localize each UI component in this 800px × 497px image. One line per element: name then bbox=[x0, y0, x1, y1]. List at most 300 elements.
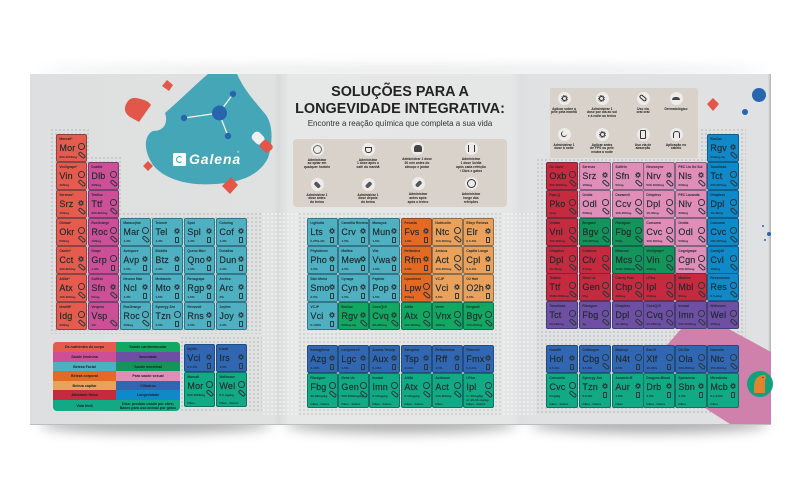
card: Mto: Melatonin bbox=[155, 277, 171, 281]
card: Cvl bbox=[707, 246, 739, 274]
card: Rfm bbox=[401, 246, 432, 274]
card: Vwa: Vwa bbox=[372, 254, 390, 264]
card: Imn: Imn bbox=[372, 382, 388, 392]
card: Mbl: 80mg bbox=[678, 294, 686, 298]
card: Act: 150-300mg bbox=[435, 267, 451, 271]
card: Lpw: 350mg bbox=[404, 295, 414, 299]
card: Rfm: Rfm bbox=[404, 254, 422, 264]
card: Drb: Cães · Gatos bbox=[646, 402, 665, 406]
application text 2 bbox=[587, 106, 617, 118]
card: Lpw: Lipowheat bbox=[404, 277, 421, 281]
card: Ipl: Cães · Gatos bbox=[466, 402, 485, 406]
card: Tct: Tct bbox=[710, 170, 722, 180]
card: Roc: RocOrange bbox=[123, 305, 141, 309]
legend note: Dica: produto usado por cães; bbox=[122, 402, 174, 406]
legend item: Beleza capilar bbox=[72, 384, 96, 388]
card: Rgp: Renagrape bbox=[187, 277, 204, 281]
card: Wel: Wel bbox=[710, 310, 726, 320]
card: Tsp: Tsp bbox=[404, 354, 419, 364]
card: Hol: Hololift bbox=[549, 348, 561, 352]
card: Vci: 5-100% bbox=[310, 323, 321, 327]
instruction text 8: Administrar bbox=[462, 192, 480, 196]
instruction text 3 bbox=[402, 157, 432, 169]
icon: meal bbox=[411, 142, 424, 155]
legend item: Imunidade bbox=[139, 355, 157, 359]
card: Oxb bbox=[546, 162, 578, 190]
card: Pko bbox=[546, 190, 578, 218]
card: Imn: Cães · Gatos bbox=[372, 402, 391, 406]
card: Gen: Gen bbox=[582, 282, 600, 292]
application text 8: cabelo bbox=[671, 146, 681, 150]
card: Joy: Joy bbox=[219, 310, 234, 320]
application text 5 bbox=[553, 142, 575, 150]
card: Rff: Reflorestina bbox=[435, 348, 454, 352]
icon: capsule bbox=[636, 92, 650, 104]
card: Rgv: 500mg-2g bbox=[341, 323, 356, 327]
card: Sfn bbox=[88, 274, 119, 302]
application text 3: Uso via bbox=[637, 106, 649, 110]
card: Mor: Cães bbox=[187, 400, 195, 404]
card: Tct: 50-200mg bbox=[549, 322, 564, 326]
card: Aux: 5-10% bbox=[372, 366, 381, 370]
card: Vci: VC-IP bbox=[435, 277, 444, 281]
card: O2h: O2 Hair bbox=[466, 277, 478, 281]
card: Tel: Telomir bbox=[155, 221, 167, 225]
card: Srz: Srz bbox=[59, 198, 74, 208]
card: Pho: 1-5% bbox=[310, 267, 318, 271]
card: Cct: Cct bbox=[59, 254, 74, 264]
card: Pop: Pop bbox=[372, 282, 389, 292]
legend item: Os nutrientes do corpo bbox=[65, 345, 104, 349]
legend item bbox=[116, 381, 180, 391]
card: Ttf bbox=[88, 190, 119, 218]
card: Res: Resveravine bbox=[710, 276, 730, 280]
instruction text 5: dose antes bbox=[308, 196, 326, 200]
card: Elr: Elr bbox=[466, 226, 478, 236]
card: Mcs: Mcs bbox=[615, 254, 632, 264]
card: Sfn: 50mg bbox=[615, 183, 623, 187]
card: Atx: 100-400mg bbox=[59, 295, 75, 299]
card: Vci: Vci bbox=[187, 352, 200, 362]
card: O2h: 3-5% bbox=[466, 295, 474, 299]
card: Wel: Cães · Gatos bbox=[219, 400, 238, 404]
instruction text 4 bbox=[456, 157, 486, 173]
card: Vsp: 1% bbox=[91, 323, 96, 327]
card: Rns: Rns bbox=[187, 310, 204, 320]
legend item: Saúde cardiovascular bbox=[129, 345, 167, 349]
card: Wel: Wel bbox=[219, 380, 235, 390]
card: Imn bbox=[675, 301, 707, 328]
card: Mun: Munayca bbox=[372, 221, 386, 225]
card: Mbl: Mbl bbox=[678, 282, 694, 292]
card: Cof: Cof bbox=[219, 226, 234, 236]
card: Vci bbox=[432, 274, 463, 302]
card: Drb bbox=[643, 373, 675, 408]
card: Tel: Tel bbox=[155, 226, 168, 236]
card: Lts: 0,25%-3% bbox=[310, 239, 325, 243]
card: Nls: 300mg bbox=[678, 183, 688, 187]
card: Nls bbox=[675, 162, 707, 190]
card: Vin bbox=[56, 162, 87, 190]
card: Vin: VinOgrape* bbox=[646, 249, 664, 253]
instruction text 4: / Cães e gatos bbox=[460, 169, 482, 173]
card: Dlb: 300mg bbox=[91, 183, 101, 187]
card: Fbg bbox=[612, 218, 644, 246]
card: Joy bbox=[216, 302, 247, 330]
card: Roc: 100mg bbox=[123, 323, 133, 327]
card: Chp bbox=[612, 273, 644, 300]
card: Ntc bbox=[707, 345, 739, 372]
card: Irs bbox=[216, 344, 247, 372]
card: Cct bbox=[56, 246, 87, 274]
card: Gen: Gene Uc bbox=[341, 376, 355, 380]
card: Sfn: Sfn bbox=[91, 282, 106, 292]
card: Sbn: Sbn bbox=[678, 382, 695, 392]
card: Ncl bbox=[120, 274, 151, 302]
card: Mor: 500-1000mg bbox=[187, 393, 205, 397]
card: Ccv: 100-200mg bbox=[615, 211, 631, 215]
card: Bgv: Bergavit bbox=[466, 305, 480, 309]
card: Mcb: Mcb bbox=[710, 382, 728, 392]
card: Srz: Serenzo* bbox=[59, 193, 74, 197]
card: Atx: 100-300mg bbox=[404, 323, 420, 327]
card: Cbg: 0,5-3% bbox=[582, 366, 592, 370]
card: Oxb: 500-1000mg bbox=[549, 183, 567, 187]
card: Idg bbox=[56, 302, 87, 330]
card: Mar bbox=[120, 218, 151, 246]
application text 7: Uso via de bbox=[635, 142, 651, 146]
card: Tct: Tonalimax bbox=[549, 304, 565, 308]
card: Tzn: 0,5-3% bbox=[582, 394, 592, 398]
card: Rff bbox=[432, 345, 463, 372]
card: Idg: Idg bbox=[59, 310, 73, 320]
card: Btz: Btz bbox=[155, 254, 169, 264]
card: Sbn: Spinsensa bbox=[678, 376, 695, 380]
card: Vnl: Vinitae bbox=[549, 221, 560, 225]
card: Mcb: Cães bbox=[710, 402, 718, 406]
card: Arc: Arc bbox=[219, 282, 234, 292]
card: Fbg: 500g bbox=[615, 239, 622, 243]
card: Ipl: Ipl bbox=[646, 282, 656, 292]
card: Hol: Hol bbox=[549, 354, 564, 364]
instruction text 2 bbox=[356, 158, 380, 169]
card: Nlv: PEC Lavanda bbox=[678, 193, 699, 197]
card: Rgv: BioCav bbox=[341, 305, 353, 309]
card: Mcs: Mitocare bbox=[615, 249, 629, 253]
card: Sfn: Sulfirin bbox=[91, 277, 103, 281]
card: Clv bbox=[579, 246, 611, 274]
card: Mun: 1-5% bbox=[372, 239, 380, 243]
card: Cvq: CoxsQ10 bbox=[646, 304, 661, 308]
legend item: Cílindros bbox=[140, 384, 156, 388]
card: Rns bbox=[184, 302, 215, 330]
card: Cvq: 30-200mg bbox=[372, 323, 387, 327]
card: Cof: Coloring bbox=[219, 221, 233, 225]
card: Ipl: Ipl bbox=[466, 382, 476, 392]
card: Gen: Gene Uc bbox=[582, 276, 596, 280]
card: Cbg bbox=[579, 345, 611, 372]
card: Drb: Drb bbox=[646, 382, 662, 392]
card: Vnl: 150-300mg bbox=[549, 239, 565, 243]
card: Xlf bbox=[643, 345, 675, 372]
card: Roc: 100mg bbox=[91, 239, 101, 243]
card: Gen: Cães · Gatos bbox=[341, 402, 360, 406]
card: Mun bbox=[369, 218, 400, 246]
card: Fbg bbox=[307, 373, 338, 408]
icon: pill after workout bbox=[362, 178, 375, 191]
card: Crv: Camellia Reviera bbox=[341, 221, 368, 225]
card: Ncl: 1-3% bbox=[123, 295, 131, 299]
card: Cvl: 100mg bbox=[710, 267, 720, 271]
card: Vnx: 150mg bbox=[435, 323, 445, 327]
card: Mto: 1-5% bbox=[155, 295, 163, 299]
card: Tct: 250-500mg bbox=[710, 183, 726, 187]
icon: sun midday bbox=[596, 128, 608, 140]
card: Vin bbox=[643, 246, 675, 274]
card: Rgv: Rgv bbox=[341, 310, 358, 320]
card: Vci: Vci bbox=[435, 282, 448, 292]
legend item: Para saúde sexual bbox=[132, 374, 164, 378]
card: Tel bbox=[152, 218, 183, 246]
card: Cvc: Curcuma bbox=[646, 221, 661, 225]
card: Vnl: Vnl bbox=[549, 226, 563, 236]
card: Tzn: Tzn bbox=[582, 382, 598, 392]
application text 6: Aplicar antes bbox=[592, 142, 612, 146]
card: Odl: 500mg bbox=[678, 239, 688, 243]
card: Mcs: 1000-1500mg bbox=[615, 267, 635, 271]
card: Vsp: Vespero bbox=[91, 305, 104, 309]
card: Dlb: Dualite bbox=[91, 165, 102, 169]
legend item bbox=[116, 371, 180, 381]
card: Dpl: 10-40mg bbox=[646, 211, 659, 215]
card: Tsp bbox=[401, 345, 432, 372]
application text 3: oral oral bbox=[636, 110, 650, 114]
card: Lgc bbox=[338, 345, 369, 372]
card: Act: Act bbox=[435, 382, 449, 392]
card: Cvc: 100-400mg bbox=[710, 239, 726, 243]
card: Dpl: Dpl bbox=[646, 198, 660, 208]
legend item bbox=[53, 352, 116, 362]
card: Oxb: Oxb bbox=[549, 170, 566, 180]
card: Act: Actimove bbox=[435, 376, 450, 380]
card: Fbg: Fbg bbox=[310, 382, 326, 392]
card: Mor: 800-1000mg bbox=[59, 155, 77, 159]
card: O2h: O2h bbox=[466, 282, 484, 292]
card: Cvq: 30-200mg bbox=[646, 322, 661, 326]
card: Lpw bbox=[401, 274, 432, 302]
card: Srz: 150mg bbox=[59, 211, 69, 215]
card: Mcb bbox=[707, 373, 739, 408]
instruction text 8 bbox=[462, 192, 480, 204]
card: Cvq: CoxsQ10 bbox=[372, 305, 387, 309]
card: Idg: Idealift* bbox=[59, 305, 71, 309]
card: N4t: 3-5% bbox=[615, 366, 623, 370]
card: Fbg: 30-60mg/kg bbox=[310, 394, 327, 398]
card: Atx bbox=[401, 373, 432, 408]
card: Fbg: Fibragum bbox=[615, 221, 630, 225]
instruction text 3: almoço e jantar bbox=[405, 165, 429, 169]
application text 1: pele pela manhã bbox=[551, 110, 577, 114]
card: Ntc: Nutricolin bbox=[435, 221, 451, 225]
card: Bgv: Bergavit bbox=[582, 221, 596, 225]
card: Nlv: 300mg bbox=[678, 211, 688, 215]
card: Aux: Aux bbox=[372, 354, 388, 364]
card: Act: Act bbox=[435, 254, 449, 264]
card: Cyn: 1-5% bbox=[341, 295, 349, 299]
card: Aur: Aur bbox=[615, 382, 630, 392]
card: Xlf: 10-30% bbox=[646, 366, 657, 370]
card: Ccv: Ccv bbox=[615, 198, 632, 208]
instruction text 7 bbox=[408, 192, 428, 204]
instruction text 6: do treino bbox=[361, 200, 375, 204]
instruction text 4: Administrar bbox=[462, 157, 480, 161]
card: Lgc: Longevicell bbox=[341, 348, 360, 352]
card: Dpl: Dimpless bbox=[710, 193, 725, 197]
icon: mascot bbox=[747, 371, 773, 397]
card: Ttf: Teaflux bbox=[91, 193, 103, 197]
card: Ncl: Neuron Max bbox=[123, 277, 142, 281]
card: Btz: Bioblitz bbox=[155, 249, 167, 253]
application text 2: Administrar 1 bbox=[591, 106, 613, 110]
card: Mbl bbox=[675, 273, 707, 300]
card: Elr bbox=[463, 218, 494, 246]
icon: pill around workout bbox=[412, 177, 425, 190]
card: Imn bbox=[369, 373, 400, 408]
card: Rns: Renovoil bbox=[187, 305, 201, 309]
card: O2h bbox=[463, 274, 494, 302]
icon: pill before workout bbox=[311, 178, 324, 191]
card: Xlf: Xlf bbox=[646, 354, 658, 364]
card: Ttf: Ttf bbox=[549, 282, 560, 292]
card: Wel: 0-5 mg/kg bbox=[219, 393, 234, 397]
card: Sfn: Sulfirin bbox=[615, 165, 627, 169]
card: Bgv: 150-500mg bbox=[582, 239, 598, 243]
card: Fbg: Fbg bbox=[582, 310, 598, 320]
card: Rns: 1-5% bbox=[187, 323, 195, 327]
card: Smo: Smo bbox=[310, 282, 330, 292]
card: Ntc: Ntc bbox=[710, 354, 724, 364]
text: ® bbox=[237, 150, 239, 154]
card: Chp: Cherry Pure bbox=[615, 276, 634, 280]
card: Fmx bbox=[463, 345, 494, 372]
card: Mor: Mor bbox=[59, 142, 76, 152]
icon: sun and moon bbox=[596, 92, 608, 104]
card: Mew bbox=[338, 246, 369, 274]
application text 2: dose por dia ao sol bbox=[587, 110, 617, 114]
card: Cvc: Cvc bbox=[710, 226, 726, 236]
card: Dun bbox=[216, 246, 247, 274]
legend item bbox=[116, 352, 180, 362]
instruction text 1: Administrar bbox=[308, 158, 326, 162]
card: Rgp bbox=[184, 274, 215, 302]
instruction text 6: dose depois bbox=[358, 196, 378, 200]
card: Mew: 1-5% bbox=[341, 267, 349, 271]
card: Dpl: 10-40mg bbox=[615, 322, 628, 326]
card: Bgv: 150-500mg bbox=[466, 323, 482, 327]
card: Odl bbox=[675, 218, 707, 246]
card: Tzn: Tzn bbox=[155, 310, 171, 320]
card: Dun: 1-3% bbox=[219, 267, 227, 271]
card: Chp: 480mg bbox=[615, 294, 625, 298]
instruction text 6 bbox=[357, 192, 379, 204]
application text 4: Dermatológico bbox=[664, 106, 688, 110]
card: Cvc: Cvc bbox=[549, 382, 566, 392]
card: Cpl bbox=[463, 246, 494, 274]
card: Cvl: CuraQ10 bbox=[710, 249, 724, 253]
card: Fbg: Fibragum bbox=[582, 304, 597, 308]
legend item bbox=[53, 381, 116, 391]
card: Bgv bbox=[463, 302, 494, 330]
card: Roc bbox=[120, 302, 151, 330]
card: Nrv: Neurosyne bbox=[646, 165, 663, 169]
legend item: Vida fértil bbox=[76, 404, 93, 408]
card: Cbg: Cbg bbox=[582, 354, 600, 364]
title bbox=[295, 82, 505, 116]
card: Arc bbox=[216, 274, 247, 302]
card: Lpw: Lpw bbox=[404, 282, 422, 292]
card: Aux: Auxina Tricolp bbox=[372, 348, 395, 352]
card: Odl: Odl bbox=[582, 198, 597, 208]
card: Tsp: 3-10% bbox=[404, 366, 413, 370]
card: Smo: Skin Moist bbox=[310, 277, 327, 281]
card: Vin: 400mg bbox=[59, 183, 69, 187]
card: Bgv bbox=[579, 218, 611, 246]
title: SOLUÇÕES PARA A bbox=[331, 84, 469, 100]
card: Imn: Imn bbox=[678, 310, 694, 320]
card: Cpl: Cpl bbox=[466, 254, 480, 264]
card: Res bbox=[707, 273, 739, 300]
card: Cvc: Cvc bbox=[646, 226, 662, 236]
card: Vci: 0,5-3% bbox=[187, 365, 197, 369]
card: Ntc: 150-300mg bbox=[710, 366, 726, 370]
legend note bbox=[120, 402, 176, 410]
card: Dpl: Dpl bbox=[615, 310, 630, 320]
card: Aur: 1-5% bbox=[615, 394, 623, 398]
card: Fbg: Fbg bbox=[615, 226, 632, 236]
card: Odl: Oxidix bbox=[678, 221, 688, 225]
card: Mor: Morosil* bbox=[59, 137, 72, 141]
card: Roc: RocOrange bbox=[91, 221, 109, 225]
application text 1: Aplicar sobre a bbox=[552, 106, 576, 110]
card: Mar: Mar bbox=[123, 226, 140, 236]
card: Ntc bbox=[432, 218, 463, 246]
card: Odl bbox=[579, 190, 611, 218]
icon: clock bbox=[311, 143, 324, 156]
card: Dpl: 10-40mg bbox=[549, 267, 562, 271]
card: Rgv: BioCav bbox=[710, 137, 722, 141]
card: Tsp: Sensphor bbox=[404, 348, 420, 352]
card: Rfm: 3-5% bbox=[404, 267, 412, 271]
card: Mto bbox=[152, 274, 183, 302]
card: Vsp bbox=[88, 302, 119, 330]
card: Grp bbox=[88, 246, 119, 274]
card: N4t bbox=[612, 345, 644, 372]
card: Spl: Spl bbox=[187, 226, 201, 236]
card: Cof: 1-3% bbox=[219, 239, 227, 243]
title: LONGEVIDADE INTEGRATIVA: bbox=[295, 100, 505, 116]
card: Elr: Elixyr Renova bbox=[466, 221, 488, 225]
card: Tzn: Cães · Gatos bbox=[582, 402, 601, 406]
card: Idg: 200mg bbox=[59, 323, 69, 327]
card: Rfm: Reflamina bbox=[404, 249, 420, 253]
instruction text 7: antes após bbox=[409, 196, 427, 200]
card: Ttf: 1000-2000mg bbox=[549, 294, 569, 298]
application text 3 bbox=[636, 106, 650, 114]
card: Nls: Nls bbox=[678, 170, 692, 180]
card: Sbn: 2-5% bbox=[678, 394, 686, 398]
card: Irs: 1-3% bbox=[219, 365, 227, 369]
application text 6 bbox=[590, 142, 614, 154]
